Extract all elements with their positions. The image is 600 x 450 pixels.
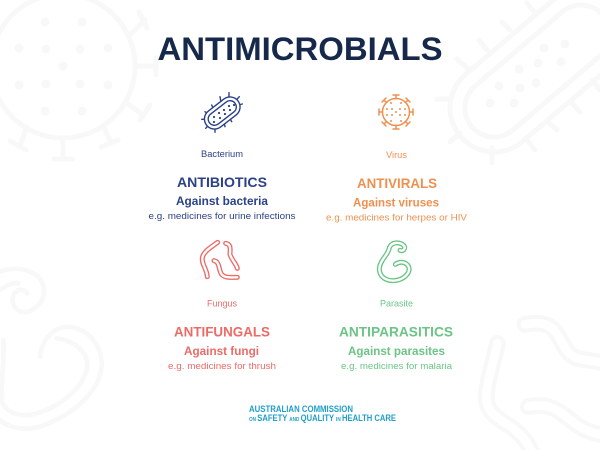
background: faint parasite [0,269,102,429]
example text: e.g. medicines for urine infections [148,211,296,222]
panel: antiparasitics [339,243,453,372]
background: faint fungus [486,323,600,450]
panel: antifungals [168,242,276,372]
panel: antibiotics [148,93,296,222]
icon: virus [379,95,413,129]
label: fungus: Fungus [207,298,237,308]
heading: antibiotics: ANTIBIOTICS [177,174,267,190]
subheading: Against parasites [348,346,445,358]
heading: antifungals: ANTIFUNGALS [174,324,270,340]
label: parasite: Parasite [380,298,413,308]
icon: bacterium [202,93,242,132]
label: virus: Virus [386,150,408,160]
logo: Australian Commission on Safety and Quality in Health Care: AUSTRALIAN COMMISSION [249,404,353,414]
example text: e.g. medicines for malaria [341,361,453,372]
title: ANTIMICROBIALS [158,31,442,67]
logo: Australian Commission on Safety and Quality in Health Care [249,404,396,423]
subheading: Against fungi [184,346,259,358]
subheading: Against viruses [353,198,439,210]
subheading: Against bacteria [176,196,269,208]
panel: antivirals [326,95,468,224]
background: faint virus [0,0,156,159]
label: bacterium: Bacterium [201,149,243,159]
heading: antivirals: ANTIVIRALS [357,175,437,191]
logo: Australian Commission on Safety and Quality in Health Care: ON SAFETY AND QUALITY IN HEALTH CARE [249,413,396,423]
heading: antiparasitics: ANTIPARASITICS [339,324,453,340]
icon: parasite [379,243,409,281]
example text: e.g. medicines for herpes or HIV [326,212,468,224]
background: faint bacterium [437,3,600,163]
example text: e.g. medicines for thrush [168,361,276,372]
icon: fungus [202,242,237,277]
